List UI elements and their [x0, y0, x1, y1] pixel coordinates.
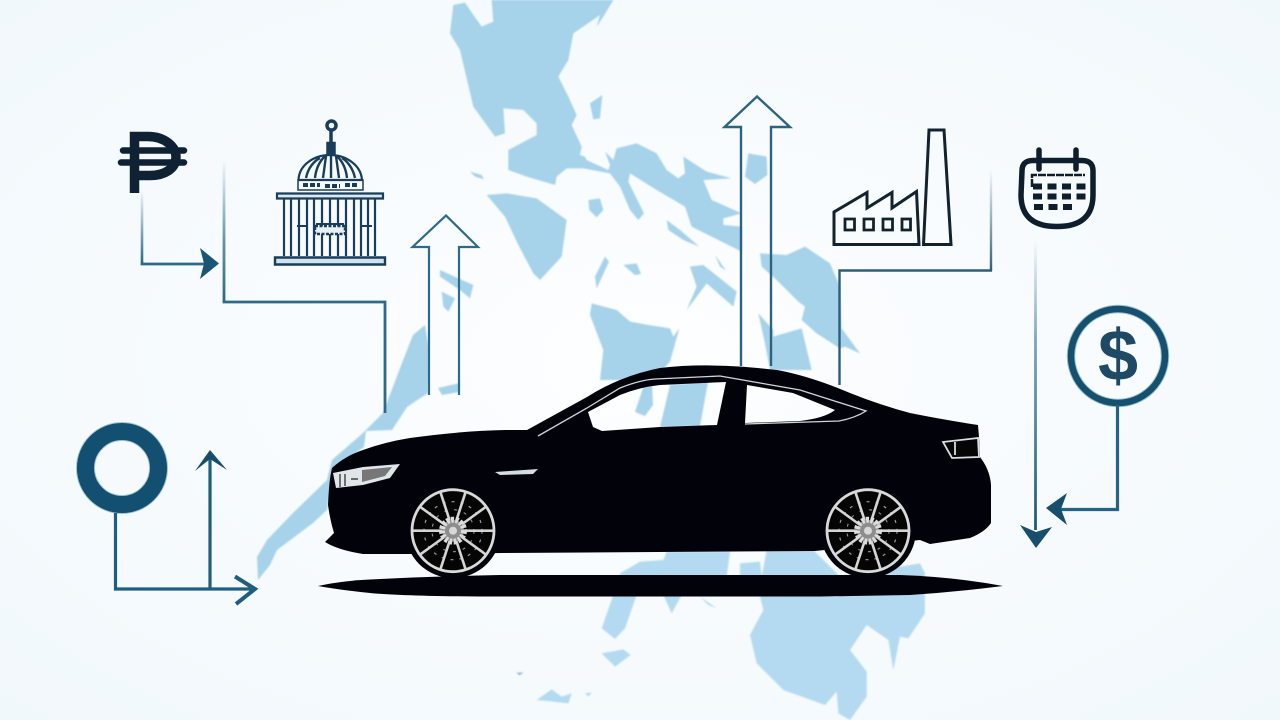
icon: peso sign — [121, 136, 184, 193]
up arrow: centre outline — [724, 96, 790, 366]
roof highlight line — [538, 376, 866, 436]
map of the Philippines — [257, 0, 925, 720]
map: islands seen through the car windows — [635, 382, 708, 427]
map: islet near Palawan — [438, 383, 460, 395]
arrow: dollar to left — [1046, 405, 1118, 525]
car body with window cut-outs — [325, 365, 991, 554]
arrows: ring to right and upward — [116, 450, 255, 604]
map: Mindanao and southern islands — [517, 550, 925, 720]
arrow: peso to right — [142, 192, 219, 279]
up arrow: left outline — [412, 216, 478, 395]
icon: calendar — [1021, 150, 1093, 226]
icon: dollar coin — [1071, 309, 1165, 403]
icon: government building — [275, 121, 385, 264]
map: northern islands — [440, 0, 860, 380]
tail light — [943, 438, 979, 458]
rear wheel — [827, 490, 909, 572]
icon: dollar coin: $ — [1098, 316, 1138, 396]
headlight — [333, 464, 400, 488]
car silhouette — [325, 365, 991, 578]
icon: factory — [834, 130, 951, 244]
arrow: calendar downward — [1020, 240, 1052, 548]
icon: ring marker — [86, 432, 158, 504]
connector: right elbow line — [840, 170, 992, 385]
rear tyre — [820, 482, 916, 578]
front door side marker — [495, 469, 538, 475]
front tyre — [405, 482, 501, 578]
front wheel — [412, 490, 494, 572]
map: Palawan — [257, 325, 429, 580]
connector: left elbow line — [223, 160, 385, 413]
ground shadow — [318, 575, 1003, 596]
